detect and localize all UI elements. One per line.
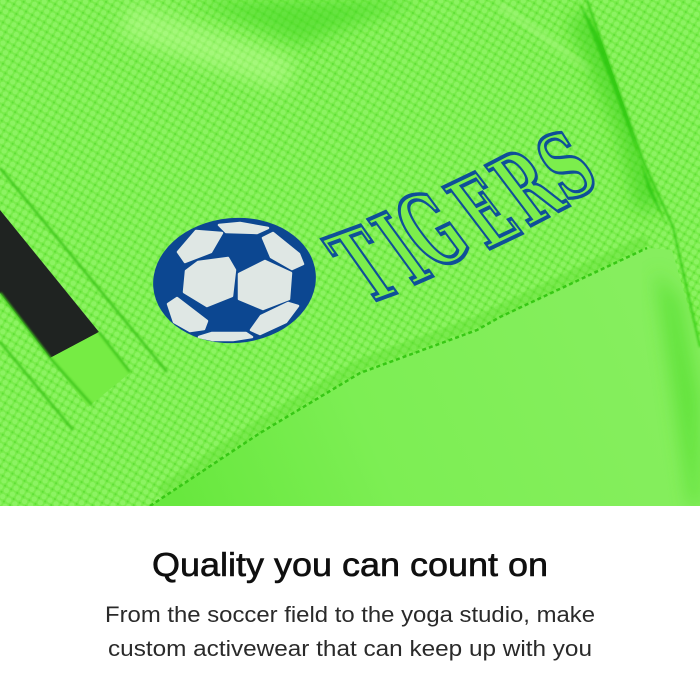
lower right shadow (655, 270, 700, 506)
team name TIGERS: G (374, 171, 491, 292)
zipper tape (0, 210, 99, 358)
body text line 2: custom activewear that can keep up with you (108, 636, 592, 661)
top shadow fold (190, 0, 420, 45)
soccer ball logo (153, 218, 316, 344)
team name TIGERS: I (353, 193, 451, 306)
heading: Quality you can count on (152, 546, 548, 583)
placket end patch (50, 332, 131, 407)
team name TIGERS: S (520, 112, 614, 222)
seam stitching (150, 248, 647, 506)
ball patches (168, 223, 303, 340)
jersey mesh fabric (0, 0, 700, 506)
upper yoke line (500, 5, 590, 70)
sleeve cloth (592, 7, 669, 205)
caption panel (0, 506, 700, 700)
team name TIGERS: R (470, 128, 585, 247)
smooth lower panel (150, 248, 700, 506)
body text line 1: From the soccer field to the yoga studio, make (105, 602, 595, 627)
ball body (153, 218, 316, 344)
sleeve edge (587, 0, 700, 347)
placket grooves (0, 168, 167, 430)
team name TIGERS: T (309, 208, 422, 325)
seam shadow band (160, 240, 647, 492)
sleeve shadow (578, 0, 668, 228)
sleeve shadow soft (580, 15, 650, 210)
top highlight (125, 20, 290, 75)
photo: green jersey (0, 0, 700, 506)
team name TIGERS: E (427, 153, 540, 270)
team name TIGERS (319, 130, 595, 302)
